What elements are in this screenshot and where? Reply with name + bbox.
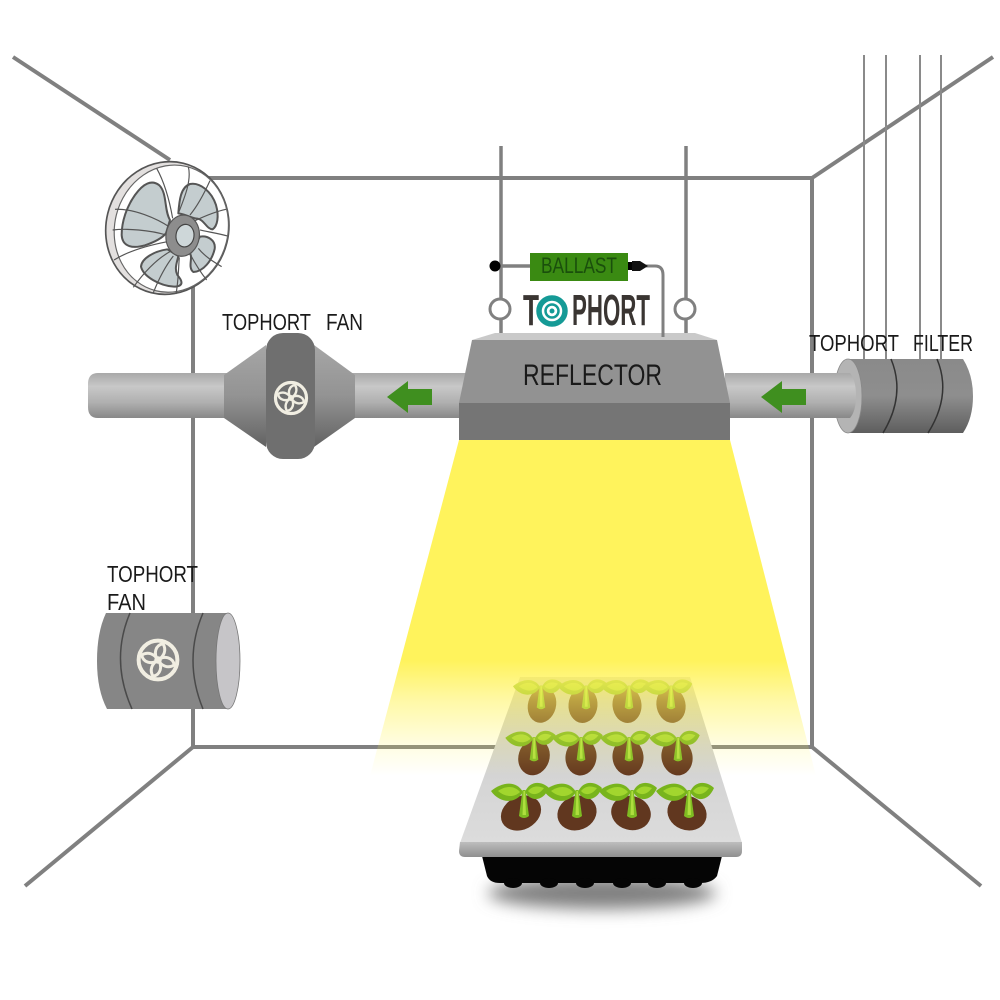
tray shadow <box>488 877 716 909</box>
icon: fan symbol <box>139 641 177 679</box>
label: tophort fan: TOPHORT <box>222 309 311 335</box>
label: tophort filter: FILTER <box>913 330 973 356</box>
label: tophort fan wall <box>107 561 198 615</box>
filter hanging cords <box>864 55 941 360</box>
light beam <box>370 440 816 776</box>
seedlings row 1 <box>513 679 692 726</box>
lamp ring left <box>490 299 510 319</box>
label: reflector: REFLECTOR <box>523 359 662 392</box>
logo: tophort: T <box>523 286 539 335</box>
label: tophort fan: FAN <box>326 309 363 335</box>
wall-mounted inline fan <box>97 613 240 709</box>
fan hub <box>163 213 202 258</box>
label: tophort filter <box>809 330 973 356</box>
airflow arrow left <box>387 381 432 413</box>
ballast box: BALLAST <box>541 253 617 278</box>
logo: tophort: PHORT <box>572 286 650 335</box>
fan blades <box>122 183 218 287</box>
wall fan <box>92 148 243 308</box>
lamp hanging rods <box>501 146 686 336</box>
airflow arrow right <box>761 381 806 413</box>
ballast wiring <box>490 260 663 337</box>
inline duct fan <box>224 333 355 459</box>
seedlings row 2 <box>505 731 700 779</box>
logo: tophort <box>523 286 650 335</box>
carbon filter <box>834 359 973 433</box>
label: tophort fan wall: TOPHORT <box>107 561 198 587</box>
icon: fan symbol <box>276 382 306 414</box>
reflector hood <box>459 333 730 440</box>
label: tophort fan wall: FAN <box>107 589 146 615</box>
fan grille <box>113 167 227 294</box>
label: tophort filter: TOPHORT <box>809 330 899 356</box>
lamp ring right <box>675 299 695 319</box>
intake duct right <box>725 373 856 418</box>
exhaust duct left <box>88 373 470 418</box>
seedlings row 3 <box>491 783 714 837</box>
seedling tray <box>459 677 742 888</box>
